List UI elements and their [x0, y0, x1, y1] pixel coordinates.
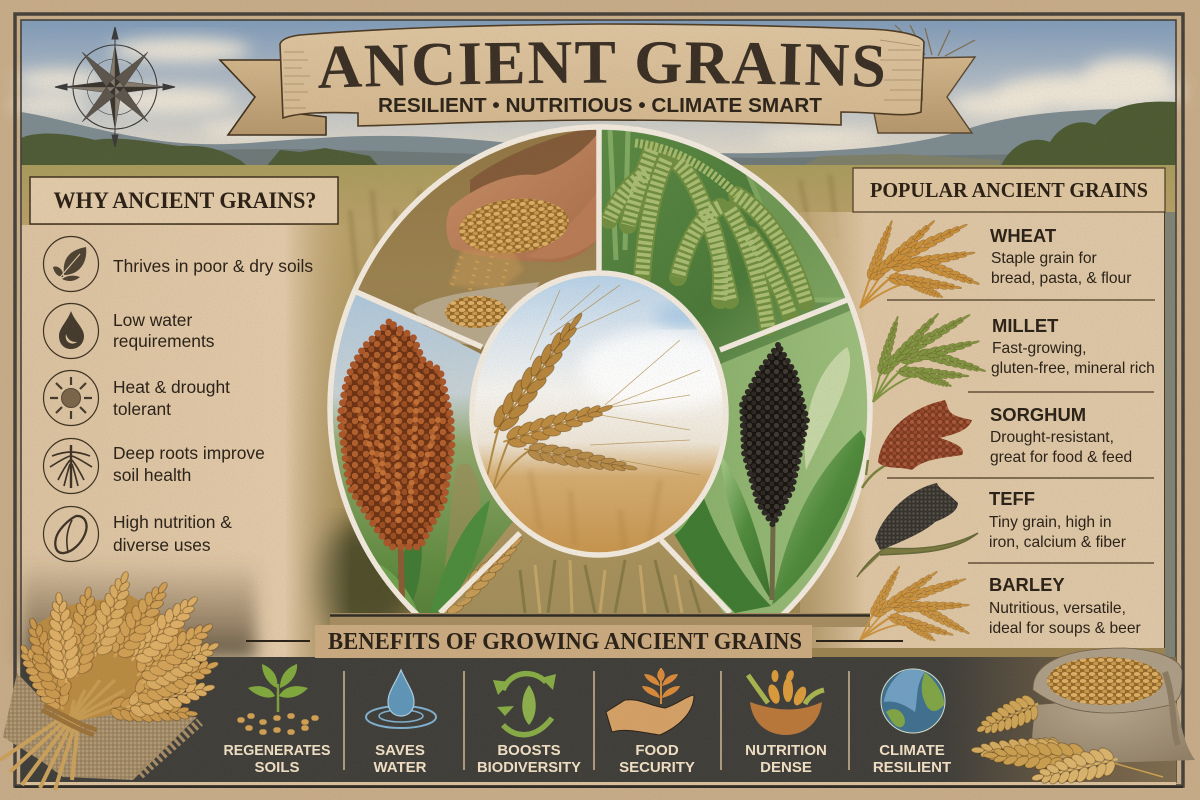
benefit: climate resilient: CLIMATE — [879, 742, 945, 759]
text: heat: Heat & drought — [113, 377, 230, 397]
text: barley — [989, 574, 1141, 637]
text: sorghum: great for food & feed — [990, 449, 1132, 466]
text: sorghum: SORGHUM — [990, 404, 1086, 425]
benefit: nutrition dense: NUTRITION — [745, 742, 827, 759]
patch: below wheel — [330, 613, 870, 627]
icon: sun — [50, 377, 92, 419]
field streaks — [350, 175, 838, 290]
text: wheat — [990, 225, 1131, 287]
benefit: food security: FOOD — [635, 742, 679, 759]
icon: water drop — [59, 311, 84, 349]
right parchment — [800, 212, 1165, 648]
title: ANCIENT GRAINS — [318, 42, 884, 88]
sky — [21, 20, 1176, 160]
text: barley: BARLEY — [989, 574, 1065, 595]
banner fold shading — [283, 40, 921, 108]
text: millet: MILLET — [992, 315, 1059, 336]
text: teff — [989, 488, 1126, 551]
hills — [21, 108, 1176, 170]
text: nutrition: High nutrition & — [113, 512, 232, 532]
benefit: regenerates soils — [224, 664, 330, 776]
subtitle: RESILIENT • NUTRITIOUS • CLIMATE SMART — [378, 94, 822, 117]
heading plaque: WHY ANCIENT GRAINS? — [54, 188, 316, 213]
banner body — [280, 24, 924, 126]
benefit: boosts biodiversity: BOOSTS — [497, 742, 561, 759]
icon: sorghum — [862, 400, 972, 488]
photo: central wheat — [470, 272, 740, 556]
panel: photo wheel — [327, 124, 873, 627]
icon: millet — [867, 305, 990, 402]
icon: wheat — [860, 216, 982, 308]
icon: barley — [860, 558, 980, 655]
panel: popular ancient grains — [853, 168, 1165, 655]
text: poor soils: Thrives in poor & dry soils — [113, 256, 313, 276]
photo: black sorghum — [673, 311, 868, 613]
right panel strip — [1165, 212, 1176, 657]
text: heat: tolerant — [113, 399, 171, 419]
dry grass behind banner — [895, 25, 975, 56]
right ribbon tail — [874, 57, 975, 133]
benefit: regenerates soils: REGENERATES — [224, 742, 330, 759]
text: nutrition: diverse uses — [113, 535, 211, 555]
benefit: food security — [606, 668, 695, 776]
text: barley: ideal for soups & beer — [989, 620, 1141, 637]
benefit: climate resilient — [873, 669, 951, 776]
heading plaque — [853, 168, 1165, 212]
benefit: regenerates soils: SOILS — [254, 759, 300, 776]
text: water: requirements — [113, 331, 215, 351]
left lower shading — [21, 560, 256, 658]
left ribbon tail — [220, 60, 326, 135]
text: wheat: WHEAT — [990, 225, 1057, 246]
field — [21, 165, 1176, 660]
text: millet — [991, 315, 1155, 377]
icon: roots — [50, 445, 92, 488]
text: wheat: bread, pasta, & flour — [991, 270, 1131, 287]
text: teff: Tiny grain, high in — [989, 514, 1112, 531]
heading plaque — [30, 177, 338, 224]
heading plaque: BENEFITS OF GROWING ANCIENT GRAINS — [328, 629, 802, 655]
text: water: Low water — [113, 310, 192, 330]
wheel dividers — [352, 127, 847, 613]
benefit: saves water: SAVES — [375, 742, 425, 759]
landscape scene — [10, 20, 1185, 660]
panel: benefits band — [15, 625, 1183, 787]
text: millet: gluten-free, mineral rich — [991, 360, 1155, 377]
benefit: boosts biodiversity: BIODIVERSITY — [477, 759, 581, 776]
benefit: nutrition dense: DENSE — [760, 759, 812, 776]
text: roots: Deep roots improve — [113, 443, 265, 463]
heading plaque — [246, 625, 903, 658]
photo: wheat field — [444, 534, 702, 613]
benefit: food security: SECURITY — [619, 759, 695, 776]
benefit: nutrition dense — [745, 669, 827, 776]
wheel rim — [327, 124, 873, 613]
icon: teff — [857, 483, 978, 577]
lower field patch — [310, 520, 420, 640]
text: wheat: Staple grain for — [991, 250, 1097, 267]
text: sorghum — [990, 404, 1132, 466]
icon: leaf — [53, 247, 86, 282]
clouds — [10, 38, 1185, 146]
title banner — [218, 23, 976, 136]
photo: hands holding grain — [358, 130, 596, 354]
tree lines — [21, 102, 1176, 168]
photo: red sorghum — [332, 294, 513, 613]
heading plaque: POPULAR ANCIENT GRAINS — [870, 178, 1148, 202]
left parchment — [21, 225, 351, 657]
panel: why ancient grains — [30, 177, 338, 562]
illustration: grain sack — [970, 648, 1195, 796]
text: roots: soil health — [113, 465, 191, 485]
benefit: saves water — [366, 670, 436, 776]
icon: grain — [55, 516, 87, 553]
benefit: saves water: WATER — [373, 759, 427, 776]
text: teff: TEFF — [989, 488, 1035, 509]
text: sorghum: Drought-resistant, — [990, 429, 1114, 446]
icon: compass rose — [55, 27, 175, 147]
text: millet: Fast-growing, — [992, 340, 1086, 357]
benefit: boosts biodiversity — [477, 674, 581, 776]
text: teff: iron, calcium & fiber — [989, 534, 1126, 551]
photo: green millet — [602, 130, 850, 364]
benefit: climate resilient: RESILIENT — [873, 759, 951, 776]
illustration: wheat sheaf — [0, 565, 226, 790]
text: barley: Nutritious, versatile, — [989, 600, 1126, 617]
